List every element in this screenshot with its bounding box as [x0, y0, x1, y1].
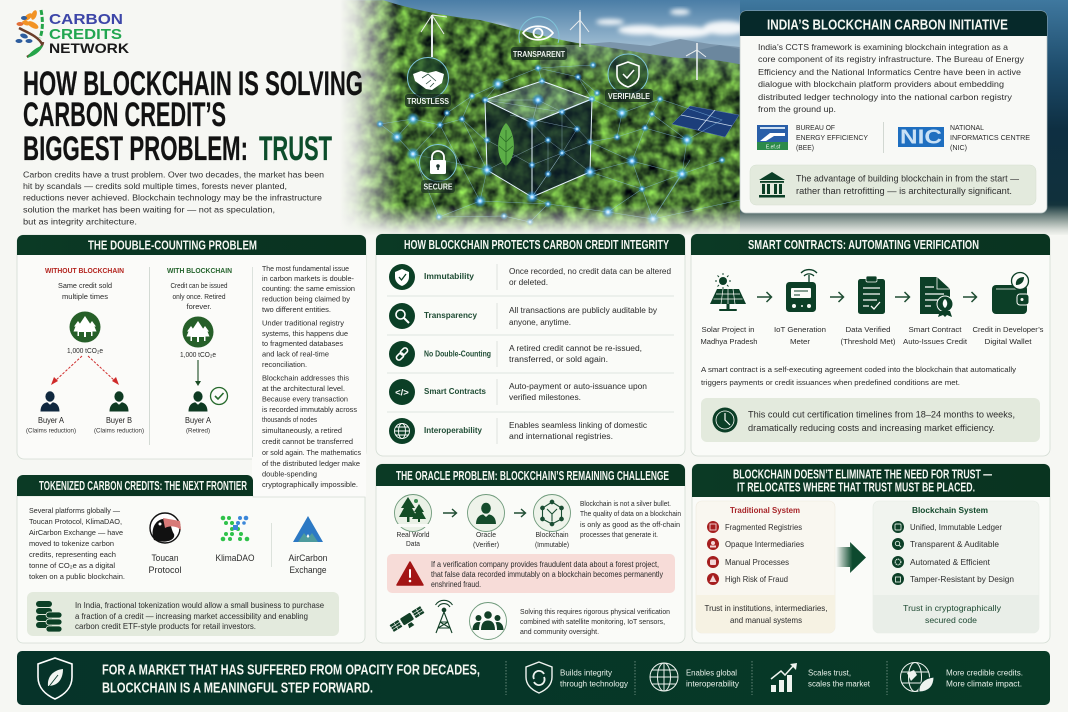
text: double-counting explanation: systems, this happens due — [262, 329, 348, 338]
arrow: step 3 — [895, 292, 910, 302]
title: BIGGEST PROBLEM: — [23, 130, 248, 168]
logo: Toucan Protocol — [148, 513, 182, 575]
logo: KlimaDAO — [216, 516, 254, 563]
box: traditional system: and manual systems — [730, 616, 802, 625]
logo: NIC: NIC — [900, 126, 942, 148]
text: not a silver bullet: processes that generate it. — [580, 530, 658, 539]
text: smart contract definition — [701, 365, 1016, 387]
logo: Carbon Credits Network: CREDITS — [49, 26, 122, 43]
arrow: step 1 — [757, 292, 772, 302]
logo: Toucan Protocol: Toucan — [152, 553, 178, 563]
list: traditional items: High Risk of Fraud — [725, 575, 788, 584]
step: smart contract issues credit: Auto-Issues Credit — [903, 337, 968, 346]
badge: transparent: TRANSPARENT — [513, 50, 565, 59]
badge: secure — [420, 144, 456, 193]
list: traditional items: Manual Processes — [725, 558, 789, 567]
icon: community — [470, 602, 506, 640]
icon: forest credit retired — [182, 316, 214, 348]
benefit: global interoperability: interoperability — [686, 680, 739, 688]
text: verification solutions: and community oversight. — [520, 627, 599, 636]
icon: signal tower — [436, 600, 452, 633]
text: verification solutions — [520, 607, 670, 636]
icon: warning triangle — [397, 562, 423, 585]
panel: the oracle problem — [376, 464, 685, 643]
arrow: traditional to blockchain — [836, 542, 866, 573]
text: India framework: core component of its registry infrastructure. The Bureau of Energy — [758, 54, 1025, 64]
row: smart contracts: verified milestones. — [509, 393, 581, 402]
text: closing statement: BLOCKCHAIN IS A MEANINGFUL STEP FORWARD. — [102, 680, 373, 696]
title — [23, 65, 363, 168]
panel: blockchain relocates trust — [692, 464, 1050, 643]
flow: oracle verifier: (Verifier) — [473, 540, 499, 549]
callout: fractional tokenization in India: a fraction of a credit — increasing market accessibility and enabling — [75, 612, 308, 621]
row: smart contracts — [389, 379, 647, 405]
step: IoT meter — [774, 270, 826, 346]
row: smart contracts: Smart Contracts — [424, 387, 487, 396]
text: BEE name: (BEE) — [796, 145, 814, 152]
text: double-counting explanation: is recorded immutably across — [262, 405, 357, 414]
icon: magnifier — [389, 303, 415, 329]
badge: trustless — [405, 58, 451, 107]
header: tokenized: TOKENIZED CARBON CREDITS: THE NEXT FRONTIER — [39, 479, 247, 493]
callout: certification timelines — [701, 398, 1040, 442]
step: IoT meter: Meter — [790, 337, 810, 346]
benefit: builds integrity: Builds integrity — [560, 668, 612, 678]
text: double-counting explanation: Blockchain addresses this — [262, 374, 349, 382]
benefit: builds integrity — [526, 662, 628, 693]
text: India framework: distributed ledger technology into the national carbon registry — [758, 92, 1013, 102]
intro text: solution the market has been waiting for — not as speculation, — [23, 204, 275, 214]
list: blockchain items: Automated & Efficient — [910, 558, 991, 567]
network lines — [380, 65, 740, 222]
text: double-counting explanation: or sold again. The mathematics — [262, 448, 361, 457]
row: no double-counting: transferred, or sold again. — [509, 355, 608, 364]
text: double-counting explanation: to fragmented databases — [262, 339, 343, 348]
column: with blockchain: only once. Retired — [172, 292, 226, 301]
text: not a silver bullet: Blockchain is not a silver bullet. — [580, 499, 671, 508]
row: immutability: Immutability — [424, 272, 475, 281]
text: double-counting explanation — [262, 264, 361, 489]
row: no double-counting: A retired credit cannot be re-issued, — [509, 344, 642, 353]
callout: certification timelines: This could cut certification timelines from 18–24 months to weeks, — [748, 410, 1015, 420]
column: with blockchain: forever. — [186, 302, 212, 311]
flow: oracle verifier — [468, 494, 504, 549]
column: without blockchain: (Claims reduction) — [26, 428, 76, 434]
flow: oracle verifier: Oracle — [476, 530, 496, 539]
header: smart contracts: SMART CONTRACTS: AUTOMATING VERIFICATION — [748, 238, 979, 252]
text: tokenization platforms: moved to tokenize carbon — [29, 539, 114, 548]
icon: buyer B — [110, 391, 128, 412]
icon: chain link — [389, 341, 415, 367]
icon: solar panel — [672, 106, 739, 137]
flow: blockchain immutable: Blockchain — [536, 530, 568, 539]
column: without blockchain: Buyer A — [38, 416, 65, 425]
box: blockchain system: secured code — [925, 616, 977, 625]
logo: Carbon Credits Network: CARBON — [49, 11, 123, 28]
icon: logo tree — [16, 9, 43, 58]
text: tokenization platforms — [29, 506, 125, 581]
step: solar project: Solar Project in — [702, 325, 754, 334]
title: CARBON CREDIT’S — [23, 96, 226, 134]
callout: fraud warning: enshrined fraud. — [431, 580, 481, 589]
logo: AirCarbon Exchange: Exchange — [290, 565, 326, 575]
text: double-counting explanation: in carbon markets is double- — [262, 274, 354, 283]
text: tokenization platforms: credits, representing each — [29, 550, 116, 559]
icon: buyer A retired — [188, 391, 208, 412]
step: digital wallet: Digital Wallet — [984, 337, 1032, 346]
benefit: global interoperability — [650, 663, 739, 691]
text: smart contract definition: A smart contract is a self-executing agreement coded into the blockchain that automatically — [701, 365, 1016, 374]
intro text — [23, 170, 324, 226]
footer banner — [17, 651, 1050, 705]
step: smart contract issues credit: Smart Contract — [908, 325, 962, 334]
row: smart contracts: Auto-payment or auto-issuance upon — [509, 382, 647, 391]
text: NIC name — [950, 125, 1030, 152]
text: closing statement — [102, 662, 480, 696]
step: IoT meter: IoT Generation — [774, 325, 826, 334]
benefit: scales the market: Scales trust, — [808, 668, 851, 678]
header: tokenized — [17, 475, 253, 496]
box: blockchain system — [873, 501, 1039, 633]
text: NIC name: (NIC) — [950, 145, 967, 152]
benefit: climate impact: More climate impact. — [946, 680, 1022, 688]
icon: glass blockchain cube with leaf — [485, 81, 592, 197]
benefit: climate impact: More credible credits. — [946, 668, 1023, 678]
box: traditional system: Trust in institutions, intermediaries, — [704, 604, 828, 613]
network nodes — [376, 61, 726, 226]
text: tokenization platforms: tonne of CO₂e as a digital — [29, 561, 115, 570]
header: oracle — [376, 464, 685, 486]
panel: the double-counting problem — [17, 235, 366, 497]
text: BEE name: ENERGY EFFICIENCY — [796, 135, 868, 142]
column: without blockchain — [26, 266, 144, 434]
benefit: scales the market — [771, 663, 871, 692]
row: no double-counting: No Double-Counting — [424, 350, 491, 358]
hero image: forest with blockchain network — [340, 0, 1068, 236]
step: smart contract issues credit — [903, 277, 968, 346]
logo: KlimaDAO: KlimaDAO — [216, 553, 254, 563]
column: without blockchain: (Claims reduction) — [94, 428, 144, 434]
text: India framework: dialogue with blockchain platform providers about embedding — [758, 79, 1004, 89]
step: digital wallet — [972, 272, 1044, 346]
flow: real world data — [394, 494, 432, 548]
header: protects integrity: HOW BLOCKCHAIN PROTECTS CARBON CREDIT INTEGRITY — [404, 238, 669, 252]
icon: globe — [389, 418, 415, 444]
flow: real world data: Data — [406, 539, 420, 548]
logo: Toucan Protocol: Protocol — [148, 565, 182, 575]
flow: blockchain immutable: (Immutable) — [535, 540, 569, 549]
text: India framework: Efficiency and the National Informatics Centre have been in active — [758, 67, 1021, 77]
text: India framework: from the ground up. — [758, 104, 836, 114]
text: tokenization platforms: AirCarbon Exchange — have — [29, 528, 123, 537]
badge: verifiable: VERIFIABLE — [608, 92, 651, 101]
logo: Carbon Credits Network: NETWORK — [49, 40, 129, 56]
list: traditional items: Opaque Intermediaries — [725, 540, 804, 549]
arrow: data to oracle — [443, 509, 456, 517]
list: blockchain items: Unified, Immutable Ledger — [910, 523, 1002, 532]
text: NIC name: NATIONAL — [950, 125, 984, 132]
arrow: oracle to blockchain — [514, 509, 526, 517]
text: double-counting explanation: Under traditional registry — [262, 318, 344, 328]
column: with blockchain: WITH BLOCKCHAIN — [167, 266, 232, 275]
text: verification solutions: Solving this requires rigorous physical verification — [520, 607, 670, 616]
text: smart contract definition: triggers payments or credit issuances when predefined conditions are met. — [701, 378, 960, 387]
header: India panel — [740, 11, 1047, 36]
icon: leaf — [498, 123, 514, 170]
column: with blockchain: Buyer A — [185, 416, 212, 425]
text: double-counting explanation: cryptographically impossible. — [262, 480, 358, 489]
header: double-counting: THE DOUBLE-COUNTING PROBLEM — [88, 238, 257, 252]
row: interoperability — [389, 418, 647, 444]
intro text: hit by scandals — credits sold multiple times, forests never planted, — [23, 181, 287, 191]
badge: trustless: TRUSTLESS — [407, 97, 450, 106]
header: relocates trust — [692, 464, 1050, 497]
column: without blockchain: Same credit sold — [58, 281, 112, 290]
title: HOW BLOCKCHAIN IS SOLVING — [23, 65, 363, 103]
callout: fraud warning: that false data recorded immutably on a blockchain becomes permanently — [431, 570, 663, 579]
icon: code brackets: </> — [395, 388, 409, 398]
text: tokenization platforms: Toucan Protocol, KlimaDAO, — [29, 517, 122, 526]
text: not a silver bullet: is only as good as the off-chain — [580, 520, 680, 529]
intro text: but as integrity architecture. — [23, 216, 137, 226]
icon: clock — [712, 408, 738, 432]
text: NIC name: INFORMATICS CENTRE — [950, 135, 1030, 142]
flow: blockchain immutable — [534, 494, 570, 549]
callout: fractional tokenization in India — [27, 592, 339, 636]
row: no double-counting — [389, 341, 642, 367]
text: BEE name — [796, 125, 868, 152]
header: relocates trust: IT RELOCATES WHERE THAT TRUST MUST BE PLACED. — [737, 480, 975, 494]
text: double-counting explanation: of the distributed ledger make — [262, 459, 360, 468]
list: traditional items: Fragmented Registries — [725, 523, 802, 532]
title: TRUST — [259, 130, 332, 168]
column: without blockchain: WITHOUT BLOCKCHAIN — [45, 266, 124, 275]
row: transparency — [389, 303, 657, 329]
callout: fraud warning — [387, 554, 675, 593]
text: tokenization platforms: Several platforms globally — — [29, 506, 120, 515]
row: immutability: Once recorded, no credit data can be altered — [509, 267, 671, 276]
icon: coin stacks — [36, 601, 62, 632]
intro text: reductions never achieved. Blockchain technology may be the infrastructure — [23, 192, 322, 202]
text: double-counting explanation: at the architectural level. — [262, 384, 345, 393]
text: double-counting explanation: reduction being claimed by — [262, 294, 350, 304]
icon: institution building — [759, 172, 785, 198]
benefit: global interoperability: Enables global — [686, 668, 737, 678]
box: traditional system: Traditional System — [730, 505, 800, 515]
logo: AirCarbon Exchange — [288, 516, 328, 575]
text: double-counting explanation: counting: the same emission — [262, 284, 355, 293]
text: double-counting explanation: Because every transaction — [262, 394, 348, 404]
header: double-counting — [17, 235, 366, 255]
text: double-counting explanation: reconciliation. — [262, 360, 307, 369]
text: double-counting explanation: The most fundamental issue — [262, 264, 349, 273]
row: transparency: anyone, anytime. — [509, 318, 571, 327]
benefit: builds integrity: through technology — [560, 680, 628, 688]
arrow: step 2 — [830, 292, 844, 302]
callout: fractional tokenization in India: carbon credit ETF-style products for retail investors. — [75, 622, 256, 631]
text: double-counting explanation: simultaneously, a retired — [262, 426, 342, 435]
text: double-counting explanation: two different entities. — [262, 305, 331, 314]
arrow: single issuance — [195, 360, 201, 386]
box: traditional system — [696, 501, 835, 633]
text: verification solutions: combined with satellite monitoring, IoT sensors, — [520, 617, 665, 626]
icon: buyer A — [40, 391, 60, 412]
icon: check badge — [210, 388, 228, 404]
badge: verifiable — [605, 54, 653, 102]
intro text: Carbon credits have a trust problem. Over two decades, the market has been — [23, 170, 324, 180]
logo: AirCarbon Exchange: AirCarbon — [288, 553, 328, 563]
header: protects integrity — [376, 234, 685, 255]
column: without blockchain: 1,000 tCO₂e — [67, 346, 103, 355]
list: traditional items — [707, 521, 804, 585]
text: tokenization platforms: token on a public blockchain. — [29, 572, 125, 581]
text: double-counting explanation: credit cannot be transferred — [262, 437, 353, 446]
row: interoperability: Enables seamless linking of domestic — [509, 421, 647, 430]
row: transparency: Transparency — [424, 311, 478, 320]
text: double-counting explanation: thousands of nodes — [262, 415, 317, 424]
step: digital wallet: Credit in Developer’s — [972, 325, 1044, 334]
icon: shield check — [389, 264, 415, 290]
column: with blockchain: (Retired) — [186, 428, 210, 434]
step: data verified: (Threshold Met) — [840, 337, 896, 346]
flow: real world data: Real World — [396, 530, 430, 539]
text: India framework: India’s CCTS framework is examining blockchain integration as a — [758, 42, 1008, 52]
text: double-counting explanation: double-spending — [262, 470, 317, 478]
column: with blockchain — [167, 266, 232, 434]
arrows: double claim — [51, 356, 119, 385]
callout: architecturally significant: rather than retrofitting — is architecturally significant. — [796, 186, 1012, 196]
row: immutability: or deleted. — [509, 278, 548, 287]
icon: satellite — [390, 606, 427, 636]
badge: secure: SECURE — [424, 182, 453, 192]
logo: BEE: E.ef.sf — [766, 144, 781, 150]
header: smart contracts — [691, 234, 1050, 255]
text: not a silver bullet: The quality of data on a blockchain — [580, 509, 681, 518]
icon: shield leaf — [38, 658, 72, 699]
text: BEE name: BUREAU OF — [796, 125, 835, 132]
step: data verified — [840, 276, 896, 346]
row: transparency: All transactions are publicly auditable by — [509, 306, 657, 315]
callout: architecturally significant: The advantage of building blockchain in from the start — — [796, 174, 1019, 184]
text: double-counting explanation: and lack of real-time — [262, 350, 329, 358]
column: without blockchain: multiple times — [62, 292, 108, 301]
step: data verified: Data Verified — [846, 325, 890, 334]
header: oracle: THE ORACLE PROBLEM: BLOCKCHAIN’S REMAINING CHALLENGE — [396, 469, 669, 483]
panel: India's blockchain carbon initiative — [740, 11, 1047, 213]
column: with blockchain: Credit can be issued — [170, 281, 228, 290]
box: blockchain system: Trust in cryptographically — [903, 604, 1002, 613]
logo: BEE — [757, 125, 788, 150]
panel: tokenized carbon credits — [17, 475, 365, 643]
benefit: scales the market: scales the market — [808, 680, 871, 688]
column: with blockchain: 1,000 tCO₂e — [180, 350, 216, 359]
text: India framework — [758, 42, 1025, 114]
text: not a silver bullet — [580, 499, 681, 539]
arrow: step 4 — [963, 292, 976, 302]
row: interoperability: Interoperability — [424, 426, 483, 435]
box: blockchain system: Blockchain System — [912, 505, 988, 515]
callout: fraud warning: If a verification company provides fraudulent data about a forest project, — [431, 560, 659, 569]
row: immutability — [389, 264, 671, 290]
list: blockchain items: Tamper-Resistant by Design — [910, 575, 1014, 584]
step: solar project: Madhya Pradesh — [700, 337, 758, 346]
callout: fractional tokenization in India: In India, fractional tokenization would allow a small business to purchase — [75, 601, 325, 610]
callout: certification timelines: dramatically reducing costs and increasing market efficiency. — [748, 423, 995, 433]
icon: code brackets — [389, 379, 415, 405]
list: blockchain items — [892, 521, 1014, 585]
benefit: climate impact — [900, 662, 1023, 692]
icon: wind turbines — [421, 10, 706, 80]
row: interoperability: and international registries. — [509, 432, 613, 441]
logo: Carbon Credits Network — [16, 9, 129, 58]
badge: transparent — [511, 17, 567, 60]
panel: how blockchain protects carbon credit integrity — [376, 234, 685, 456]
callout: architecturally significant — [750, 165, 1036, 205]
step: solar project — [700, 273, 758, 346]
icon: forest credit — [70, 312, 100, 342]
panel: smart contracts automating verification — [691, 234, 1050, 456]
list: blockchain items: Transparent & Auditable — [910, 540, 1000, 549]
header: India panel: INDIA’S BLOCKCHAIN CARBON INITIATIVE — [767, 16, 1008, 34]
column: without blockchain: Buyer B — [106, 416, 132, 425]
text: closing statement: FOR A MARKET THAT HAS SUFFERED FROM OPACITY FOR DECADES, — [102, 662, 480, 678]
